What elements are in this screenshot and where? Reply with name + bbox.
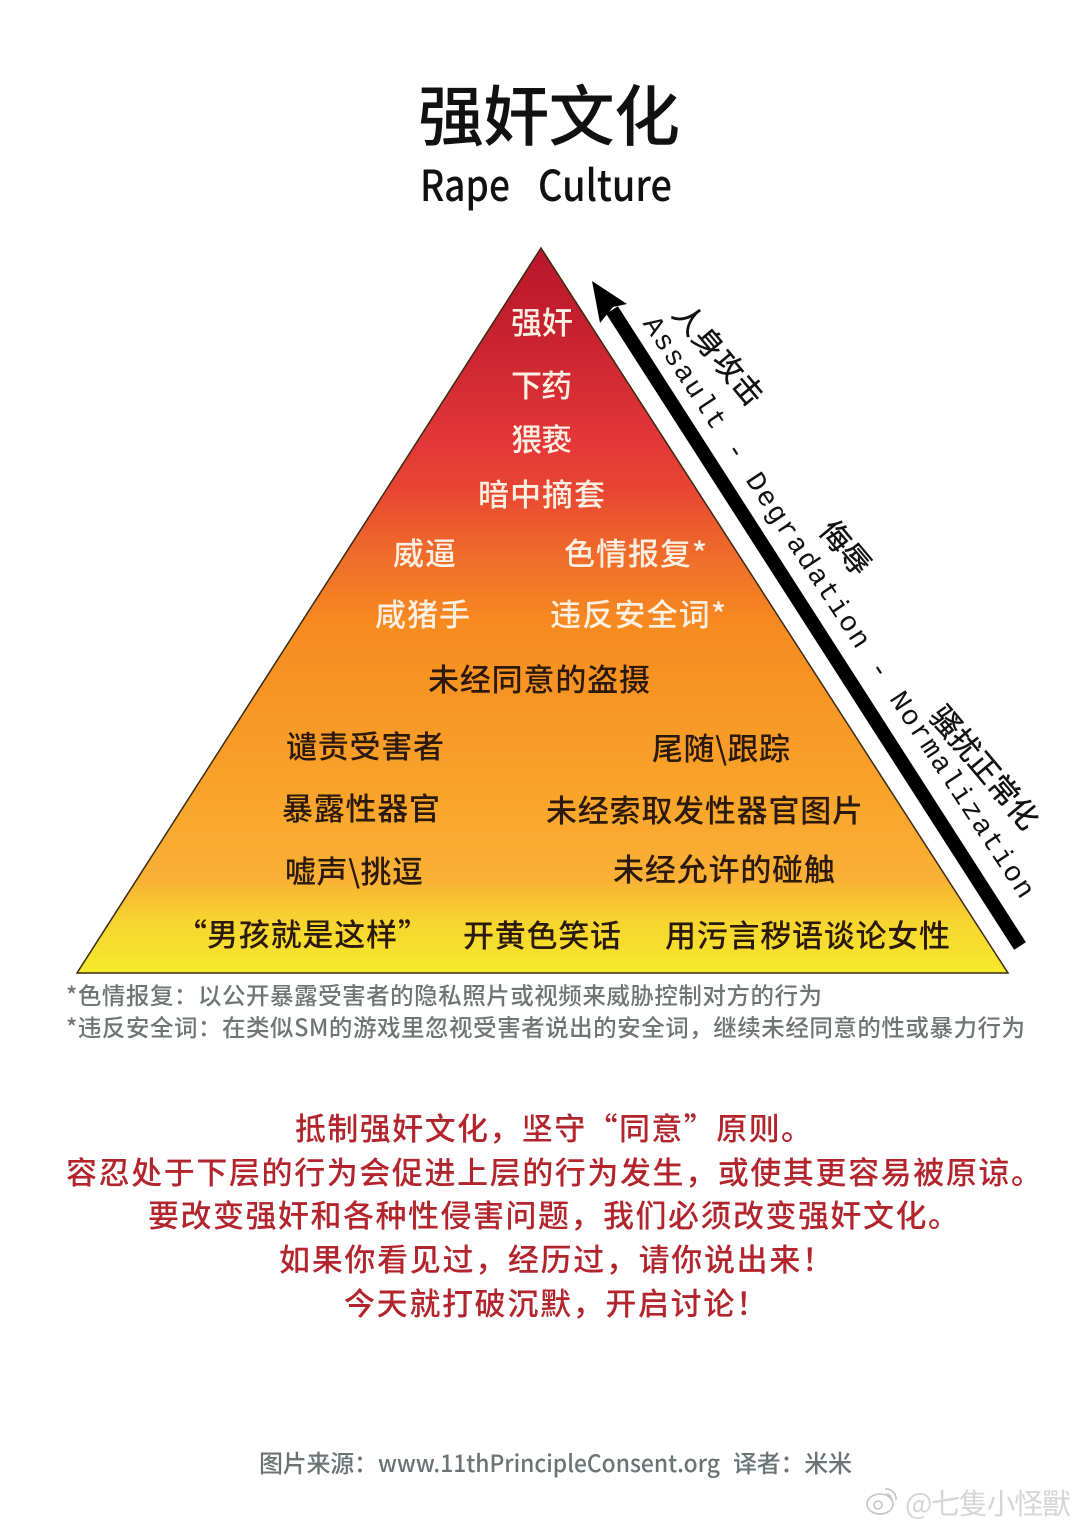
arrow label: 侮辱: 侮辱 — [811, 509, 883, 583]
labels: normalization tier: 用污言秽语谈论女性 — [665, 911, 950, 956]
source credit: 译者：米米 — [733, 1444, 852, 1479]
labels: degradation tier: 威逼 — [393, 529, 456, 574]
source credit — [259, 1444, 852, 1479]
labels: normalization tier: 谴责受害者 — [286, 722, 444, 767]
call to action: 要改变强奸和各种性侵害问题，我们必须改变强奸文化。 — [148, 1191, 959, 1236]
labels: normalization tier — [176, 655, 950, 956]
label: boys will be boys: ” — [398, 910, 429, 955]
label: boys will be boys: 男孩就是这样 — [207, 910, 397, 955]
title — [418, 64, 680, 214]
pyramid — [77, 248, 1008, 973]
pyramid triangle — [77, 248, 1008, 973]
labels: normalization tier: 未经同意的盗摄 — [428, 655, 650, 700]
source credit: www.11thPrincipleConsent.org — [378, 1444, 720, 1479]
labels: degradation tier: 违反安全词* — [550, 590, 726, 635]
arrow label: English: Assault - Degradation - Normalization — [635, 311, 1040, 905]
labels: top tier — [478, 298, 605, 515]
title: English: Culture — [538, 152, 672, 214]
labels: normalization tier: 未经索取发性器官图片 — [546, 786, 863, 831]
title: Chinese: 强奸文化 — [418, 64, 680, 160]
watermark — [867, 1481, 1071, 1523]
source credit: 图片来源： — [259, 1444, 378, 1479]
title: English: Rape — [420, 152, 510, 214]
labels: degradation tier — [375, 529, 726, 635]
labels: degradation tier: 色情报复* — [564, 529, 707, 574]
labels: top tier: 猥亵 — [511, 415, 572, 460]
footnotes — [66, 977, 1025, 1043]
labels: normalization tier: 嘘声\挑逗 — [285, 847, 423, 892]
arrow label: 骚扰正常化: 骚扰正常化 — [921, 694, 1051, 838]
call to action: 今天就打破沉默，开启讨论！ — [344, 1279, 767, 1324]
label: boys will be boys: “ — [176, 910, 207, 955]
labels: normalization tier: 未经允许的碰触 — [613, 845, 835, 890]
call to action: 抵制强奸文化，坚守“同意”原则。 — [295, 1104, 812, 1149]
call to action: 如果你看见过，经历过，请你说出来！ — [279, 1235, 833, 1280]
labels: top tier: 下药 — [511, 361, 572, 406]
labels: normalization tier: 开黄色笑话 — [463, 911, 621, 956]
arrow: escalation — [592, 281, 1020, 946]
labels: top tier: 强奸 — [511, 298, 573, 343]
labels: normalization tier: 尾随\跟踪 — [652, 724, 790, 769]
title: English — [420, 152, 672, 214]
labels: degradation tier: 咸猪手 — [375, 590, 470, 635]
footnotes: *色情报复：以公开暴露受害者的隐私照片或视频来威胁控制对方的行为 — [66, 977, 822, 1011]
watermark text: @七隻小怪獸 — [905, 1481, 1071, 1523]
arrow label: 人身攻击: 人身攻击 — [664, 292, 776, 414]
footnotes: *违反安全词：在类似SM的游戏里忽视受害者说出的安全词，继续未经同意的性或暴力行为 — [66, 1009, 1025, 1043]
labels: normalization tier: 暴露性器官 — [282, 784, 440, 829]
labels: top tier: 暗中摘套 — [478, 470, 605, 515]
call to action: 容忍处于下层的行为会促进上层的行为发生，或使其更容易被原谅。 — [66, 1148, 1042, 1193]
icon: weibo — [867, 1489, 896, 1514]
call to action — [66, 1104, 1042, 1324]
